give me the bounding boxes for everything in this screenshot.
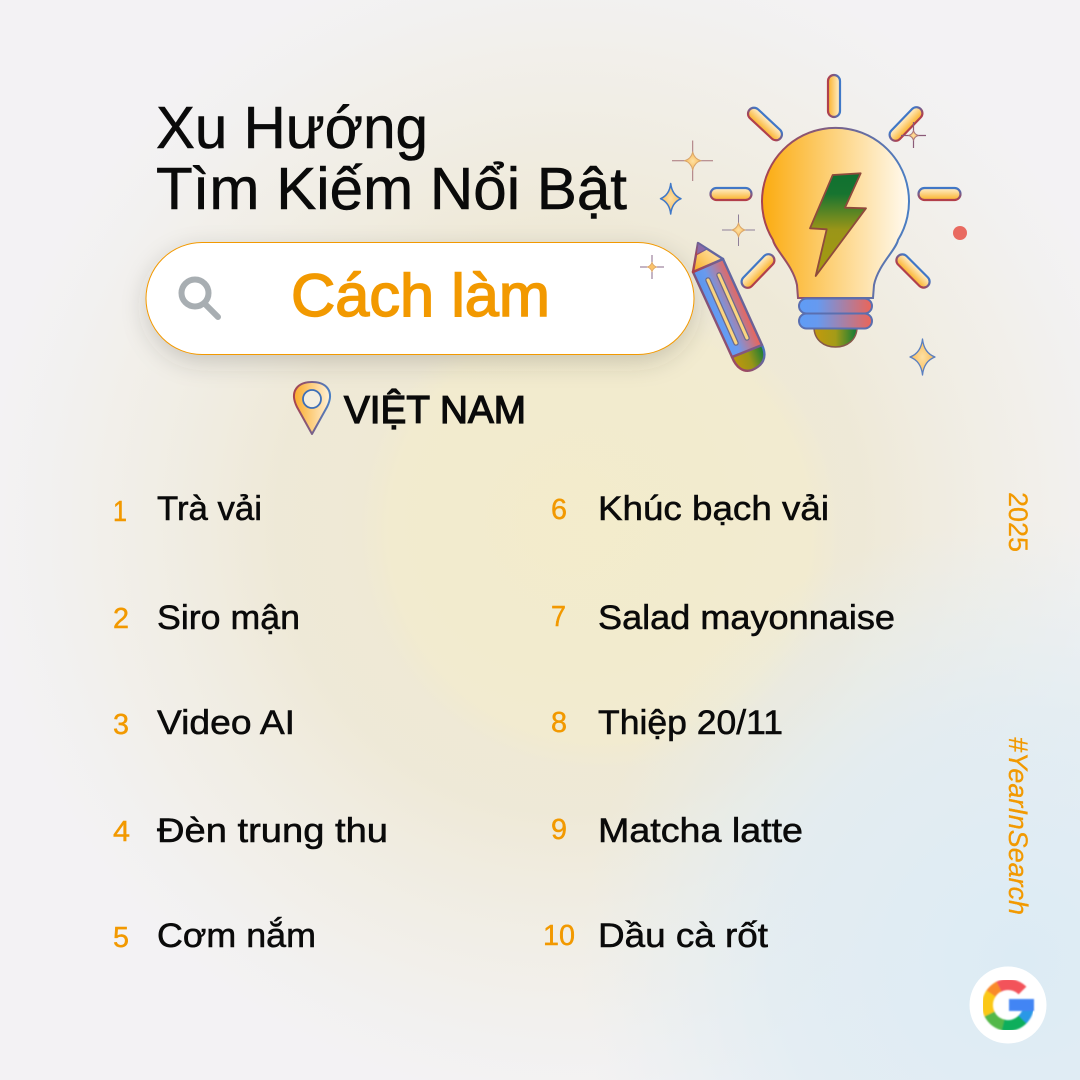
icon: bulb cap [814,327,857,347]
location name: VIỆT NAM [344,389,526,432]
item 10 [543,917,769,955]
search term: Cách làm [291,262,550,329]
title: Tìm Kiếm Nổi Bật [156,156,627,222]
item 2: Siro mận [157,599,300,637]
icon: bulb rays [710,75,960,290]
item 3: Video AI [157,704,295,742]
item 3: 3 [113,709,129,741]
icon: sparkles [660,122,935,375]
item 5: Cơm nắm [157,917,316,955]
icon: pencil [693,243,764,371]
item 10: Dầu cà rốt [598,917,769,955]
location label [294,382,526,434]
item 9: Matcha latte [598,812,803,850]
item 3 [113,704,295,742]
title: Xu Hướng [156,95,428,161]
item 8: 8 [551,707,567,739]
item 7: Salad mayonnaise [598,599,895,637]
ranked list: column 1 [113,490,388,955]
icon: map pin [294,382,330,434]
item 2: 2 [113,603,129,635]
item 9: 9 [551,814,567,846]
ranked list: column 2 [543,490,895,955]
item 1: Trà vải [157,490,262,528]
icon: small sparkle in search bar [640,255,664,279]
icon: magnifier [182,280,218,317]
icon: bulb glass [762,128,909,298]
icon: lightning bolt [810,173,866,276]
item 4: 4 [113,816,130,848]
item 1: 1 [113,496,127,528]
illustration: light bulb with rays [710,75,960,347]
item 8: Thiệp 20/11 [598,704,783,742]
item 5: 5 [113,922,129,954]
google logo [970,966,1046,1044]
vertical year label: 2025 [1003,492,1033,552]
item 7: 7 [551,601,566,633]
vertical hashtag: #YearInSearch [1003,737,1033,915]
item 4: Đèn trung thu [157,812,388,850]
search bar [146,242,694,354]
icon: bulb base bands [799,298,872,328]
item 1 [113,490,262,528]
icon: red dot [953,226,967,240]
title [156,95,627,222]
item 6: 6 [551,494,567,526]
item 10: 10 [543,920,575,952]
item 6: Khúc bạch vải [598,490,829,528]
